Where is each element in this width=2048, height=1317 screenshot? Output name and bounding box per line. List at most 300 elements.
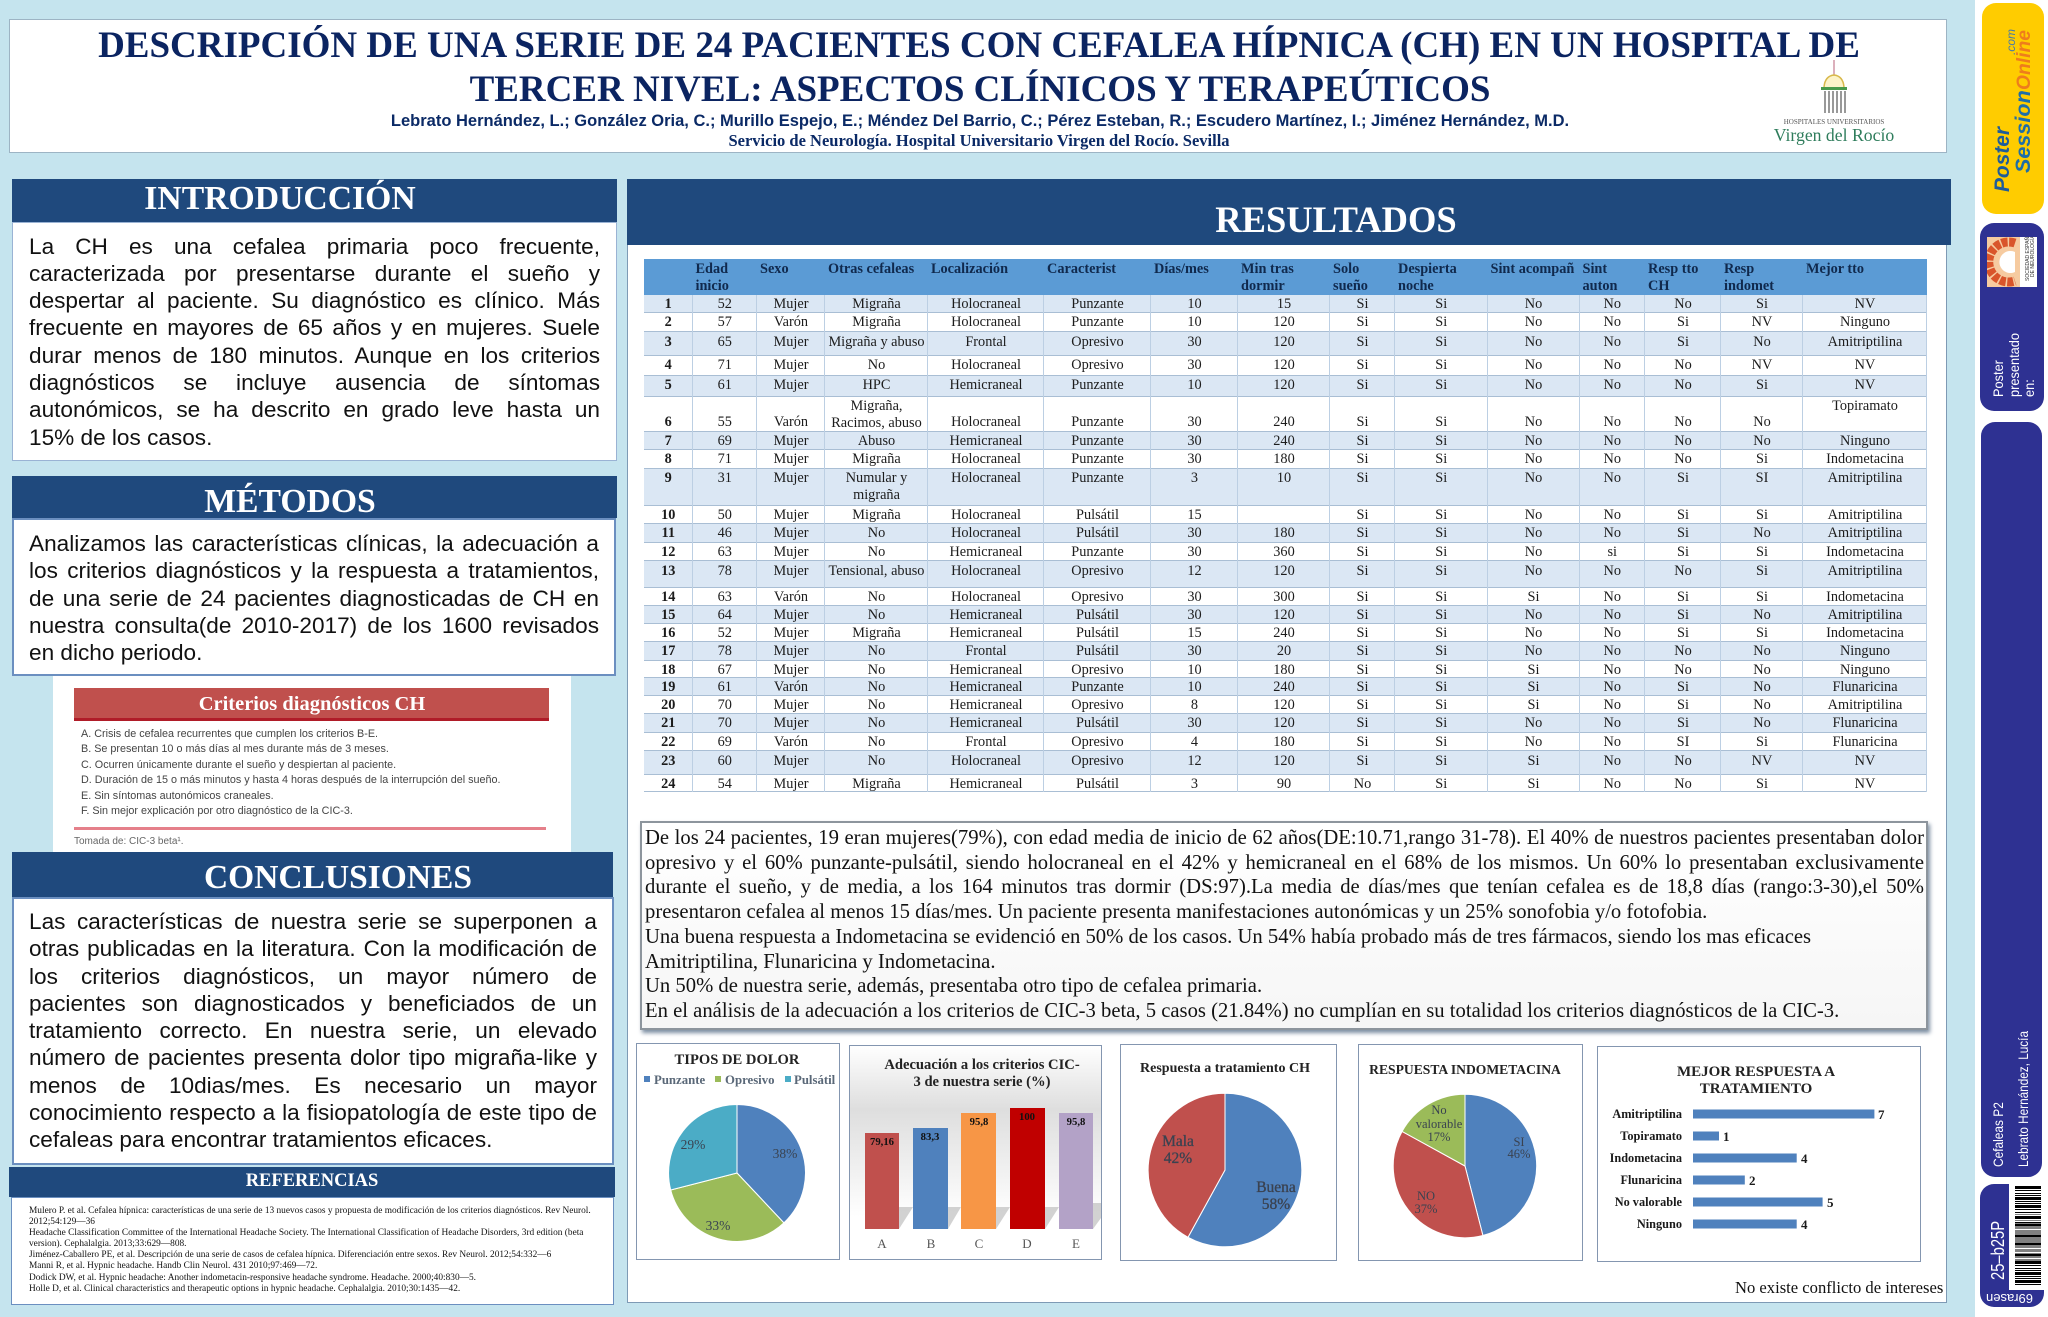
table: patients: Hemicraneal xyxy=(949,607,1023,623)
table: patients: 5 xyxy=(665,377,672,393)
table: patients: No xyxy=(1525,625,1542,641)
table: patients: No xyxy=(1674,357,1692,373)
text: introducción: 15% de los casos. xyxy=(29,425,212,450)
chart: mejor respuesta a tratamiento: Indometacina xyxy=(1610,1151,1682,1165)
table: patients: Sexo xyxy=(760,260,789,276)
table: patients: Flunaricina xyxy=(1832,734,1898,750)
heading: referencias xyxy=(9,1167,615,1197)
table: patients: 69 xyxy=(718,734,732,750)
table: patients: No xyxy=(1525,507,1542,523)
text: introducción: La CH es una cefalea primaria poco frecuente, xyxy=(29,234,600,258)
table: patients: 240 xyxy=(1273,679,1295,695)
table: patients: 8 xyxy=(665,451,672,467)
table: patients: Si xyxy=(1357,625,1368,641)
table: patients: Si xyxy=(1756,563,1768,579)
table: patients: Ninguno xyxy=(1840,433,1890,449)
chart: respuesta a tratamiento xyxy=(1120,1044,1337,1261)
text: referencias: Jiménez-Caballero PE, et al. Descripción de una serie de casos de cefalea hípnica. Diferenciación entre sexos. Rev Neurol. 2012;54:332—6 xyxy=(29,1250,551,1260)
table: patients: Si xyxy=(1435,525,1447,541)
panel: results summary xyxy=(640,821,1928,1030)
table: patients: Punzante xyxy=(1071,451,1124,467)
table: patients: No xyxy=(1525,715,1542,731)
table: patients: Si xyxy=(1435,357,1447,373)
table: patients: Edad xyxy=(696,260,728,276)
legend: Punzante xyxy=(654,1073,706,1087)
chart: adecuación a criterios: 83,3 xyxy=(921,1131,939,1143)
table: patients: No xyxy=(1604,643,1621,659)
table: patients: NV xyxy=(1752,357,1772,373)
table: patients: Si xyxy=(1435,296,1447,312)
table: patients: 15 xyxy=(661,607,675,623)
table: patients: Sint acompañ xyxy=(1490,260,1574,276)
chart: respuesta indometacina: No xyxy=(1431,1103,1447,1117)
table: patients: 12 xyxy=(661,544,675,560)
table: patients: Hemicraneal xyxy=(949,697,1023,713)
table: patients: Hemicraneal xyxy=(949,679,1023,695)
text: conclusiones: pacientes son diagnosticados y beneficiados de un xyxy=(29,991,597,1016)
table: patients: No xyxy=(1753,525,1771,541)
table: patients: No xyxy=(1674,753,1692,769)
sidebar text: poster presentado en: presentado xyxy=(2006,333,2022,397)
table: patients: Amitriptilina xyxy=(1828,525,1902,541)
table: patients: Si xyxy=(1528,753,1539,769)
legend xyxy=(644,1073,836,1087)
table: patients: Si xyxy=(1435,507,1447,523)
table: patients: dormir xyxy=(1241,278,1285,294)
chart: mejor respuesta a tratamiento: 5 xyxy=(1827,1195,1834,1210)
table: patients: Amitriptilina xyxy=(1828,607,1902,623)
table: patients: Si xyxy=(1756,377,1768,393)
table: patients: No xyxy=(1604,314,1621,330)
table: patients: Si xyxy=(1357,451,1368,467)
chart: respuesta a tratamiento: 58% xyxy=(1262,1196,1290,1213)
sidebar text: session: Cefaleas P2 xyxy=(1990,1102,2006,1167)
table: patients: Hemicraneal xyxy=(949,662,1023,678)
chart: mejor respuesta a tratamiento: MEJOR RESPUESTA A xyxy=(1677,1064,1835,1080)
table: patients: Opresivo xyxy=(1071,697,1124,713)
text: results summary: En el análisis de la adecuación a los criterios de CIC-3 beta, 5 casos (21.84%) no cumplían en su totalidad los criterios diagnósticos de la CIC-3. xyxy=(645,1000,1839,1022)
table: patients: No xyxy=(1604,507,1621,523)
table: patients: Amitriptilina xyxy=(1828,334,1902,350)
table: patients: Si xyxy=(1435,643,1447,659)
heading text: resultados: RESULTADOS xyxy=(1215,199,1457,240)
criterios list: F. Sin mejor explicación por otro diagnóstico de la CIC-3. xyxy=(81,805,353,817)
table: patients: 19 xyxy=(661,679,675,695)
table: patients: Holocraneal xyxy=(951,414,1021,430)
barcode number: 25–b25P xyxy=(1988,1221,2008,1280)
text: conclusiones: menos de 10dias/mes. Es necesario un mayor xyxy=(29,1073,597,1098)
chart: mejor respuesta a tratamiento: 4 xyxy=(1801,1151,1808,1166)
table: patients: No xyxy=(1604,776,1621,792)
chart: respuesta indometacina: 17% xyxy=(1428,1130,1450,1144)
table: patients: No xyxy=(1604,607,1621,623)
table: patients: Ninguno xyxy=(1840,662,1890,678)
table: patients: Localización xyxy=(931,260,1008,276)
table: patients: 30 xyxy=(1187,414,1202,430)
table: patients: sueño xyxy=(1333,278,1368,294)
table: patients: Mujer xyxy=(774,507,808,523)
table: patients: No xyxy=(1604,525,1621,541)
icon: hospital logo: HOSPITALES UNIVERSITARIOS xyxy=(1784,118,1884,126)
table: patients: Opresivo xyxy=(1071,734,1124,750)
table: patients: Despierta xyxy=(1398,260,1457,276)
table: patients: 30 xyxy=(1187,544,1202,560)
table: patients: Si xyxy=(1357,525,1368,541)
table: patients: 21 xyxy=(661,715,675,731)
table: patients: Mujer xyxy=(774,357,808,373)
table: patients: Opresivo xyxy=(1071,334,1124,350)
table: patients: Si xyxy=(1528,662,1539,678)
panel: header xyxy=(9,19,1947,153)
table: patients: 24 xyxy=(661,776,675,792)
table: patients: Si xyxy=(1528,589,1539,605)
table: patients: Opresivo xyxy=(1071,357,1124,373)
text: results summary: presentaron cefalea al menos 15 días/mes. Un paciente presenta manifestaciones autonómicas y un 25% sonofobia y/o fotofobia. xyxy=(645,901,1707,923)
chart: mejor respuesta a tratamiento: Topiramato xyxy=(1620,1129,1682,1143)
table: patients: Si xyxy=(1677,697,1689,713)
table: patients: 120 xyxy=(1273,377,1295,393)
text: conclusiones: conocimiento respecto a la fisiopatología de este tipo de xyxy=(29,1100,597,1125)
table: patients: Solo xyxy=(1333,260,1359,276)
text: conclusiones xyxy=(29,909,597,1152)
table: patients: Mujer xyxy=(774,643,808,659)
table: patients: 71 xyxy=(718,357,732,373)
table: patients: Si xyxy=(1677,314,1689,330)
table: patients: No xyxy=(1604,697,1621,713)
table: patients: Mujer xyxy=(774,296,808,312)
icon: hospital logo: Virgen del Rocío xyxy=(1774,125,1894,145)
table: patients: Si xyxy=(1756,776,1768,792)
chart: respuesta indometacina: 46% xyxy=(1508,1147,1530,1161)
table: patients: Otras cefaleas xyxy=(828,260,914,276)
table: patients: 2 xyxy=(665,314,672,330)
table: patients: 78 xyxy=(718,643,732,659)
title line 2: TERCER NIVEL: ASPECTOS CLÍNICOS Y TERAPEÚTICOS xyxy=(470,69,1490,110)
chart: mejor respuesta a tratamiento: 2 xyxy=(1749,1173,1756,1188)
table: patients: Migraña xyxy=(852,451,901,467)
table: patients: Si xyxy=(1357,563,1368,579)
table: patients: Pulsátil xyxy=(1076,715,1119,731)
table: patients: Pulsátil xyxy=(1076,643,1119,659)
text: introducción xyxy=(29,234,600,450)
table: patients: Holocraneal xyxy=(951,314,1021,330)
criterios list: A. Crisis de cefalea recurrentes que cumplen los criterios B-E. xyxy=(81,728,378,740)
text: métodos: en dicho periodo. xyxy=(29,640,202,665)
chart: adecuación a criterios xyxy=(849,1045,1102,1260)
table: patients: Si xyxy=(1677,507,1689,523)
criterios source: Tomada de: CIC-3 beta¹. xyxy=(74,836,184,847)
text: métodos xyxy=(29,531,599,665)
table: patients: Mujer xyxy=(774,377,808,393)
table: patients: Si xyxy=(1435,314,1447,330)
table: patients: 120 xyxy=(1273,334,1295,350)
table: patients: 10 xyxy=(1187,314,1202,330)
table: patients: 78 xyxy=(718,563,732,579)
table: patients: No xyxy=(1674,433,1692,449)
table: patients: No xyxy=(868,544,885,560)
table: patients: Si xyxy=(1435,753,1447,769)
table: patients: No xyxy=(1604,679,1621,695)
text: conclusiones: los criterios diagnósticos, un mayor número de xyxy=(29,964,597,989)
icon: barcode xyxy=(2015,1186,2041,1287)
table: patients: Si xyxy=(1528,697,1539,713)
criterios list: E. Sin síntomas autonómicos craneales. xyxy=(81,790,274,802)
text: conclusiones: cefaleas para encontrar tratamientos eficaces. xyxy=(29,1127,492,1152)
table: patients: Si xyxy=(1756,451,1768,467)
chart: respuesta a tratamiento: Respuesta a tratamiento CH xyxy=(1140,1061,1310,1076)
table: patients: Abuso xyxy=(858,433,895,449)
table: patients: Si xyxy=(1357,544,1368,560)
table: patients: Migraña xyxy=(852,296,901,312)
text: conclusiones: Las características de nuestra serie se superponen a xyxy=(29,909,597,934)
table: patients: Opresivo xyxy=(1071,589,1124,605)
text: results summary: Una buena respuesta a Indometacina se evidenció en 50% de los casos. Un 54% había probado más de tres fármacos, siendo los mas eficaces xyxy=(645,926,1811,948)
table: patients: No xyxy=(1674,662,1692,678)
table: patients: 10 xyxy=(661,507,675,523)
table: patients: No xyxy=(1753,334,1771,350)
table: patients: 30 xyxy=(1187,433,1202,449)
bars xyxy=(865,1108,1093,1229)
table: patients: Si xyxy=(1435,589,1447,605)
table: patients: Pulsátil xyxy=(1076,507,1119,523)
chart: respuesta indometacina: 37% xyxy=(1415,1202,1437,1216)
table: patients: Holocraneal xyxy=(951,357,1021,373)
table: patients: 240 xyxy=(1273,625,1295,641)
table: patients: 180 xyxy=(1273,451,1295,467)
table: patients: No xyxy=(868,697,885,713)
table: patients: NV xyxy=(1855,753,1875,769)
text: introducción: diagnósticos se incluye ausencia de síntomas xyxy=(29,370,600,395)
heading text: conclusiones: CONCLUSIONES xyxy=(204,859,472,896)
table: patients: Resp xyxy=(1724,260,1754,276)
table: patients: Punzante xyxy=(1071,470,1124,486)
text: referencias: Headache Classification Committee of the International Headache Society. The International Classification of Headache Disorders, 3rd edition (beta xyxy=(29,1228,583,1238)
table: patients: 30 xyxy=(1187,589,1202,605)
table: patients: No xyxy=(1674,414,1692,430)
table: patients: No xyxy=(868,357,885,373)
text: introducción: despertar al paciente. Su diagnóstico es clínico. Más xyxy=(29,288,600,313)
criterios rule xyxy=(74,827,546,830)
chart: adecuación a criterios: 95,8 xyxy=(970,1116,988,1128)
conflict of interest note: No existe conflicto de intereses xyxy=(1735,1278,1943,1297)
chart: respuesta indometacina: NO xyxy=(1417,1189,1435,1203)
table: patients: No xyxy=(1604,589,1621,605)
table: patients: CH xyxy=(1648,278,1669,294)
table: patients: 90 xyxy=(1277,776,1291,792)
legend: Pulsátil xyxy=(794,1073,836,1087)
table: patients: 30 xyxy=(1187,451,1202,467)
table: patients: No xyxy=(1674,377,1692,393)
table: patients: 240 xyxy=(1273,414,1295,430)
table: patients: 31 xyxy=(718,470,732,486)
table: patients: Amitriptilina xyxy=(1828,697,1902,713)
table: patients: Hemicraneal xyxy=(949,377,1023,393)
table: patients: Punzante xyxy=(1071,679,1124,695)
table: patients: Holocraneal xyxy=(951,296,1021,312)
table: patients: Si xyxy=(1435,377,1447,393)
table: patients: Si xyxy=(1756,507,1768,523)
table: patients: Punzante xyxy=(1071,377,1124,393)
table: patients: No xyxy=(1525,414,1542,430)
table: patients: 63 xyxy=(718,589,732,605)
table: patients: No xyxy=(1525,525,1542,541)
table: patients: Si xyxy=(1435,697,1447,713)
table: patients: Si xyxy=(1435,734,1447,750)
chart: mejor respuesta a tratamiento: TRATAMIENTO xyxy=(1700,1081,1812,1097)
table: patients: Holocraneal xyxy=(951,525,1021,541)
text: métodos: nuestra consulta(de 2010-2017) de los 1600 revisados xyxy=(29,613,599,638)
table: patients: No xyxy=(1604,662,1621,678)
text: métodos: Analizamos las características clínicas, la adecuación a xyxy=(29,531,599,556)
table: patients: NV xyxy=(1855,377,1875,393)
chart: mejor respuesta a tratamiento: 4 xyxy=(1801,1217,1808,1232)
text: métodos: de una serie de 24 pacientes diagnosticadas de CH en xyxy=(29,586,599,611)
chart: respuesta indometacina: RESPUESTA INDOMETACINA xyxy=(1369,1062,1561,1077)
table: patients: 120 xyxy=(1273,753,1295,769)
table: patients: No xyxy=(1753,607,1771,623)
table: patients: Amitriptilina xyxy=(1828,470,1902,486)
table: patients: Min tras xyxy=(1241,260,1294,276)
table: patients: Si xyxy=(1357,715,1368,731)
table: patients: 7 xyxy=(665,433,672,449)
table: patients: Hemicraneal xyxy=(949,715,1023,731)
table: patients: Holocraneal xyxy=(951,563,1021,579)
panel: referencias xyxy=(11,1197,614,1305)
heading text: introducción: INTRODUCCIÓN xyxy=(144,180,416,217)
panel: conclusiones xyxy=(12,897,614,1165)
table: patients: No xyxy=(1604,357,1621,373)
heading: resultados xyxy=(627,179,1951,245)
table: patients: Ninguno xyxy=(1840,314,1890,330)
table: patients: 18 xyxy=(661,662,675,678)
table: patients: Mujer xyxy=(774,662,808,678)
text: métodos: los criterios diagnósticos y la respuesta a tratamientos, xyxy=(29,558,599,583)
table: patients: Migraña xyxy=(852,625,901,641)
bars xyxy=(1693,1110,1874,1228)
table: patients: No xyxy=(1604,414,1621,430)
table: patients: Hemicraneal xyxy=(949,625,1023,641)
text: results summary: opresivo y el 60% punzante-pulsátil, siendo holocraneal en el 42% y hemicraneal en el 68% de los mismos. Un 60% lo presentaban exclusivamente xyxy=(645,852,1924,874)
chart: adecuación a criterios: C xyxy=(975,1236,983,1251)
table: patients: Si xyxy=(1435,470,1447,486)
table: patients: 50 xyxy=(718,507,732,523)
table: patients: No xyxy=(1525,451,1542,467)
chart: mejor respuesta a tratamiento: Flunaricina xyxy=(1620,1173,1682,1187)
panel: criterios diagnósticos xyxy=(53,676,571,852)
text: introducción: autonómicos, se ha descrito en grado leve hasta un xyxy=(29,397,600,422)
table: patients: Hemicraneal xyxy=(949,433,1023,449)
table: patients: NV xyxy=(1752,314,1772,330)
table: patients: 120 xyxy=(1273,357,1295,373)
table: patients: No xyxy=(1753,697,1771,713)
chart: respuesta a tratamiento: Mala xyxy=(1162,1133,1194,1150)
chart: adecuación a criterios: D xyxy=(1022,1236,1032,1251)
table: patients: No xyxy=(1525,563,1542,579)
table: patients: No xyxy=(868,662,885,678)
table: patients: 20 xyxy=(1277,643,1291,659)
chart: tipos de dolor: 38% xyxy=(773,1146,797,1161)
table: patients: Holocraneal xyxy=(951,507,1021,523)
table: patients: Punzante xyxy=(1071,433,1124,449)
table: patients: 30 xyxy=(1187,334,1202,350)
table: patients: Si xyxy=(1756,734,1768,750)
table: patients: No xyxy=(1604,334,1621,350)
chart: mejor respuesta a tratamiento: Amitriptilina xyxy=(1612,1107,1682,1121)
criterios title: Criterios diagnósticos CH xyxy=(199,693,425,715)
table: patients: 57 xyxy=(718,314,732,330)
table: patients: Si xyxy=(1756,625,1768,641)
table: patients: No xyxy=(1604,563,1621,579)
table: patients: 6 xyxy=(665,414,672,430)
table: patients: Si xyxy=(1677,679,1689,695)
chart: tipos de dolor: TIPOS DE DOLOR xyxy=(675,1052,800,1068)
table: patients: HPC xyxy=(863,377,890,393)
sidebar text: author: Lebrato Hernández, Lucía xyxy=(2015,1031,2031,1167)
table: patients: Si xyxy=(1357,753,1368,769)
table: patients: Si xyxy=(1435,433,1447,449)
table: patients: 15 xyxy=(1187,507,1202,523)
table: patients: 120 xyxy=(1273,715,1295,731)
table: patients: 70 xyxy=(718,697,732,713)
table: patients: Opresivo xyxy=(1071,563,1124,579)
table: patients: Si xyxy=(1357,662,1368,678)
table: patients: No xyxy=(1674,451,1692,467)
table: patients: 4 xyxy=(1191,734,1198,750)
table: patients: Holocraneal xyxy=(951,451,1021,467)
criterios list: D. Duración de 15 o más minutos y hasta 4 horas después de la interrupción del sueño. xyxy=(81,774,501,786)
table: patients: No xyxy=(1753,433,1771,449)
sidebar text: poster presentado en: Poster xyxy=(1991,360,2006,397)
table: patients: SI xyxy=(1677,734,1689,750)
table: patients: Mujer xyxy=(774,334,808,350)
table: patients: Amitriptilina xyxy=(1828,563,1902,579)
table: patients: Pulsátil xyxy=(1076,625,1119,641)
chart: respuesta a tratamiento: Buena xyxy=(1256,1179,1296,1196)
sidebar: congress panel xyxy=(1980,223,2044,411)
table: patients: Flunaricina xyxy=(1832,715,1898,731)
table: patients: auton xyxy=(1582,278,1617,294)
table: patients: Mujer xyxy=(774,625,808,641)
table: patients: Migraña xyxy=(852,507,901,523)
table: patients: No xyxy=(1753,715,1771,731)
table: patients: 30 xyxy=(1187,715,1202,731)
table: patients: 10 xyxy=(1277,470,1291,486)
table: patients: 30 xyxy=(1187,357,1202,373)
table: patients: 30 xyxy=(1187,607,1202,623)
chart: adecuación a criterios: 95,8 xyxy=(1067,1116,1085,1128)
table: patients: NV xyxy=(1752,753,1772,769)
table: patients: 3 xyxy=(665,334,672,350)
table: patients: 12 xyxy=(1187,753,1202,769)
table: patients: No xyxy=(868,589,885,605)
chart: mejor respuesta a tratamiento: 7 xyxy=(1878,1107,1885,1122)
panel: resultados xyxy=(627,240,1947,1303)
chart: adecuación a criterios: B xyxy=(927,1236,936,1251)
table: patients: No xyxy=(1753,679,1771,695)
table: patients: 63 xyxy=(718,544,732,560)
table: patients: 180 xyxy=(1273,525,1295,541)
table: patients: Si xyxy=(1677,470,1689,486)
table: patients: Punzante xyxy=(1071,414,1124,430)
text: results summary: durante el sueño, y de media, a los 164 minutos tras dormir (DS:97).La media de días/mes que tenían cefalea es de 18,8 días (rango:3-30),el 50% xyxy=(645,876,1924,898)
table: patients: Si xyxy=(1357,314,1368,330)
table: patients: 3 xyxy=(1191,776,1198,792)
sidebar: poster session online badge: .com xyxy=(2004,29,2018,55)
chart: tipos de dolor: 33% xyxy=(706,1218,730,1233)
table: patients: 360 xyxy=(1273,544,1295,560)
table: patients: Mujer xyxy=(774,525,808,541)
table: patients: No xyxy=(1604,753,1621,769)
